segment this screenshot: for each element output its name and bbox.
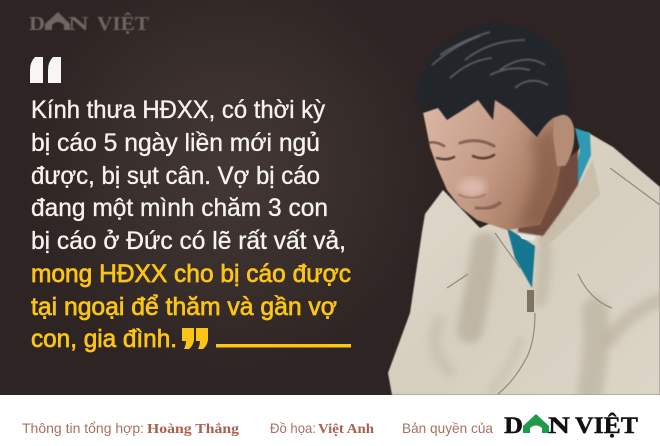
mouth	[475, 202, 501, 209]
jacket seams	[447, 168, 660, 394]
footer Dan Viet logo: D	[504, 413, 523, 438]
underline rule	[216, 344, 351, 348]
footer credits	[22, 420, 493, 437]
face shadow	[515, 125, 562, 228]
faded Dan Viet logo: D	[29, 13, 45, 35]
icon: closing quotation mark	[182, 328, 208, 349]
hair highlights	[432, 32, 548, 88]
eyes and brows	[428, 141, 494, 159]
teal collar	[570, 128, 591, 190]
quote text: được, bị sụt cân. Vợ bị cáo	[31, 162, 320, 190]
highlighted quote text	[31, 260, 351, 353]
footer credits: Hoàng Thắng	[147, 422, 239, 437]
footer Dan Viet logo: VIỆT	[575, 413, 638, 438]
highlighted quote text: mong HĐXX cho bị cáo được	[31, 260, 351, 288]
footer Dan Viet logo: N	[548, 413, 570, 438]
icon: opening quotation mark	[30, 57, 61, 83]
white undershirt	[518, 233, 536, 241]
highlighted quote text: con, gia đình.	[31, 325, 177, 353]
hair	[416, 22, 570, 137]
zipper	[527, 290, 534, 312]
faded Dan Viet logo: N	[68, 13, 90, 35]
faded Dan Viet logo	[29, 12, 150, 35]
footer Dan Viet logo	[504, 413, 638, 438]
teal shirt	[507, 228, 535, 288]
neck	[518, 150, 578, 236]
footer band	[0, 395, 660, 446]
footer credits: Thông tin tổng hợp:	[22, 420, 144, 436]
faded Dan Viet logo: VIỆT	[97, 12, 150, 35]
jacket shading	[434, 245, 660, 392]
nose	[458, 178, 486, 196]
ear	[553, 114, 574, 166]
footer credits: Bản quyền của	[402, 420, 493, 436]
highlighted quote text: tại ngoại để thăm và gần vợ	[31, 293, 337, 321]
quote text: bị cáo ở Đức có lẽ rất vất vả,	[31, 227, 346, 255]
footer credits: Đồ họa:	[270, 420, 316, 436]
jacket	[388, 132, 660, 395]
quote text: Kính thưa HĐXX, có thời kỳ	[31, 96, 325, 124]
jacket collar	[538, 160, 600, 250]
quote text: bị cáo 5 ngày liền mới ngủ	[31, 129, 320, 157]
nostril shadow	[458, 194, 486, 198]
footer credits: Việt Anh	[318, 422, 374, 437]
quote text: đang một mình chăm 3 con	[31, 194, 328, 222]
photo: man in beige jacket	[388, 22, 660, 395]
quote text	[31, 96, 346, 255]
face	[423, 80, 562, 230]
